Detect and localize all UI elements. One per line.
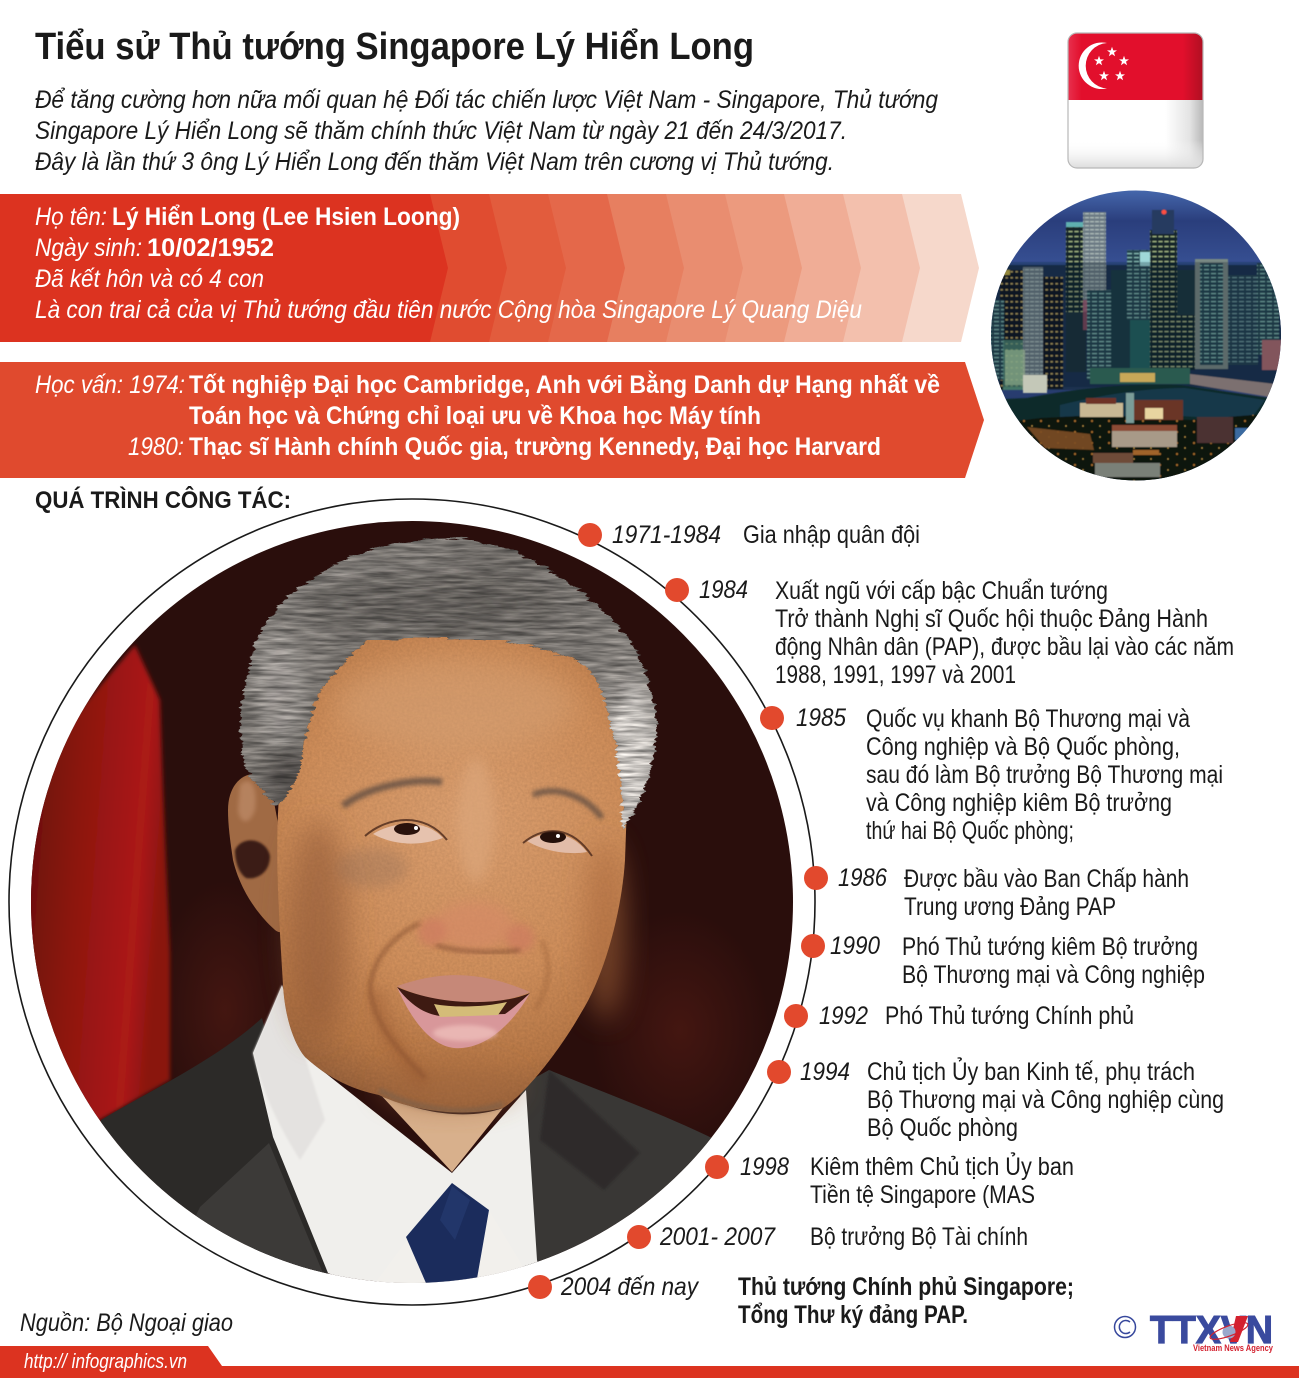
timeline item: 2004 to present: 2004 đến nay [560, 1273, 699, 1301]
timeline item: 1992 [784, 1002, 1134, 1030]
panel: education chevron band: 1980: [128, 433, 184, 461]
timeline item: 2001-2007: 2001- 2007 [659, 1223, 776, 1251]
panel: personal info chevron band: Lý Hiển Long (Lee Hsien Loong) [112, 203, 460, 231]
timeline item: 1984: Xuất ngũ với cấp bậc Chuẩn tướng [775, 577, 1108, 605]
timeline item: 1984 [665, 576, 1234, 689]
timeline item: 1992: Phó Thủ tướng Chính phủ [885, 1002, 1134, 1030]
timeline item: 1994: 1994 [800, 1058, 850, 1086]
timeline item: 1985: thứ hai Bộ Quốc phòng; [866, 817, 1074, 845]
panel: personal info chevron band: Ngày sinh: [35, 234, 142, 262]
mouth [397, 975, 530, 1048]
panel: education chevron band: Thạc sĩ Hành chính Quốc gia, trường Kennedy, Đại học Harvard [189, 433, 881, 461]
section heading: work history: QUÁ TRÌNH CÔNG TÁC: [35, 486, 291, 514]
hair [235, 530, 665, 835]
shirt and collar [253, 985, 545, 1300]
timeline item: 1998: Tiền tệ Singapore (MAS [810, 1181, 1035, 1209]
timeline item: 1971-1984: 1971-1984 [612, 521, 721, 549]
timeline item: 1971-1984 [578, 521, 920, 549]
timeline item: 1984: Trở thành Nghị sĩ Quốc hội thuộc Đảng Hành [775, 605, 1208, 633]
timeline item: 2004 to present: Thủ tướng Chính phủ Singapore; [738, 1273, 1074, 1301]
timeline item: 1986: Trung ương Đảng PAP [904, 893, 1116, 921]
panel: personal info chevron band: Đã kết hôn và có 4 con [35, 265, 264, 293]
panel: education chevron band: Tốt nghiệp Đại học Cambridge, Anh với Bằng Danh dự Hạng nhất về [189, 369, 940, 399]
timeline item: 2001-2007: Bộ trưởng Bộ Tài chính [810, 1223, 1028, 1251]
footer band with url [0, 1346, 1299, 1378]
timeline item: 1986 [804, 864, 1189, 921]
portrait photo [20, 520, 795, 1300]
intro text block: Đây là lần thứ 3 ông Lý Hiển Long đến thăm Việt Nam trên cương vị Thủ tướng. [35, 148, 834, 176]
timeline item: 1986: 1986 [838, 864, 887, 892]
timeline ring [9, 499, 815, 1305]
timeline item: 1984: 1984 [699, 576, 748, 604]
timeline item: 1998 [705, 1151, 1074, 1209]
panel: personal info chevron band [0, 194, 979, 342]
timeline item: 1985: và Công nghiệp kiêm Bộ trưởng [866, 789, 1172, 817]
timeline item: 1984: 1988, 1991, 1997 và 2001 [775, 661, 1016, 689]
panel: education chevron band: Học vấn: 1974: [35, 371, 185, 399]
timeline item: 1994: Bộ Thương mại và Công nghiệp cùng [867, 1086, 1224, 1114]
timeline item: 2004 to present [528, 1273, 1074, 1329]
logo: TTXVN: TTXVN [1150, 1309, 1273, 1352]
timeline item: 1985: Quốc vụ khanh Bộ Thương mại và [866, 705, 1190, 733]
timeline item: 1985: Công nghiệp và Bộ Quốc phòng, [866, 733, 1180, 761]
timeline item: 1985: 1985 [796, 704, 846, 732]
neck [379, 1093, 503, 1172]
timeline item: 2004 to present: Tổng Thư ký đảng PAP. [738, 1301, 968, 1329]
eyebrows and eyes [343, 781, 602, 856]
timeline item: 1985: sau đó làm Bộ trưởng Bộ Thương mại [866, 761, 1223, 789]
timeline item: 1998: Kiêm thêm Chủ tịch Ủy ban [810, 1151, 1074, 1181]
timeline item: 1994: Chủ tịch Ủy ban Kinh tế, phụ trách [867, 1056, 1195, 1086]
logo: TTXVN: Vietnam News Agency [1193, 1343, 1274, 1354]
footer band with url: http:// infographics.vn [24, 1351, 187, 1373]
timeline item: 1994 [767, 1056, 1224, 1142]
timeline item: 1971-1984: Gia nhập quân đội [743, 521, 920, 549]
face [277, 620, 630, 1112]
timeline item: 1998: 1998 [740, 1153, 789, 1181]
panel: education chevron band [0, 362, 984, 478]
panel: personal info chevron band: 10/02/1952 [147, 234, 274, 262]
source note: Nguồn: Bộ Ngoại giao [20, 1309, 233, 1337]
timeline item: 1985 [760, 704, 1223, 845]
suit jacket [100, 1018, 712, 1274]
timeline item: 2001-2007 [627, 1223, 1028, 1251]
icon: copyright symbol [1114, 1316, 1136, 1338]
timeline item: 1990: 1990 [830, 932, 880, 960]
intro text block: Singapore Lý Hiển Long sẽ thăm chính thức Việt Nam từ ngày 21 đến 24/3/2017. [35, 117, 847, 145]
panel: personal info chevron band: Là con trai cả của vị Thủ tướng đầu tiên nước Cộng hòa Singapore Lý Quang Diệu [35, 296, 862, 324]
intro text block: Để tăng cường hơn nữa mối quan hệ Đối tác chiến lược Việt Nam - Singapore, Thủ tướng [35, 86, 938, 114]
title: Tiểu sử Thủ tướng Singapore Lý Hiển Long [35, 26, 754, 68]
icon: Singapore flag [1068, 33, 1203, 168]
timeline item: 1990: Phó Thủ tướng kiêm Bộ trưởng [902, 933, 1198, 961]
timeline item: 1994: Bộ Quốc phòng [867, 1114, 1018, 1142]
timeline item: 1990: Bộ Thương mại và Công nghiệp [902, 961, 1205, 989]
intro text block [35, 86, 938, 176]
timeline item: 1992: 1992 [819, 1002, 868, 1030]
icon: Singapore skyline photo [985, 185, 1290, 490]
timeline item: 1990 [801, 932, 1205, 989]
timeline item: 1986: Được bầu vào Ban Chấp hành [904, 865, 1189, 893]
left ear [228, 774, 280, 932]
panel: personal info chevron band: Họ tên: [35, 203, 107, 231]
panel: education chevron band: Toán học và Chứng chỉ loại ưu về Khoa học Máy tính [189, 402, 761, 430]
